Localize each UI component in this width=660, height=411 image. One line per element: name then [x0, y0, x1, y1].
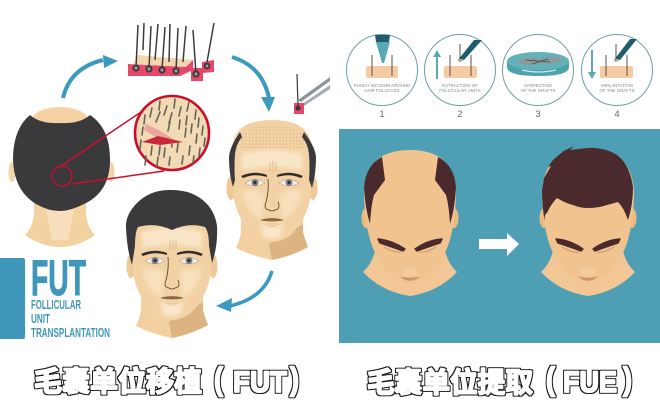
head after: restored hair — [540, 146, 636, 296]
title: FUE — [367, 361, 632, 399]
arrow: before to after — [479, 233, 519, 256]
balding head with implanted area — [226, 120, 318, 260]
hair follicle skin block with grafts — [128, 23, 214, 81]
step 3: harvesting dish — [502, 34, 574, 120]
panel: FUT follicular unit transplantation diagram — [0, 23, 330, 340]
panel: FUE before and after — [339, 129, 660, 343]
step 4: implantation: 4 — [614, 109, 620, 120]
step 1: punch incision — [346, 34, 418, 120]
arrow: step 2 to step 3 — [232, 57, 275, 112]
title: FUE: ( — [546, 361, 555, 397]
step 4: implantation: IMPLANTATION — [601, 83, 633, 88]
panel: FUE four-step strip — [346, 34, 652, 120]
FUT logo block — [0, 250, 110, 340]
title: FUT: 毛囊单位移植 — [34, 365, 202, 397]
back of head with donor area — [8, 107, 114, 247]
step 4: implantation: OF THE GRAFTS — [599, 88, 635, 93]
step 2: extraction — [424, 34, 496, 120]
tweezers holding graft — [294, 74, 330, 114]
title: FUE: FUE — [563, 366, 617, 399]
head after transplant with full hair — [126, 190, 218, 338]
step 3: harvesting dish: HARVESTING — [524, 83, 553, 88]
arrow: step 1 to step 2 — [63, 55, 118, 98]
title: FUT: ( — [214, 361, 223, 397]
step 2: extraction: 2 — [457, 109, 463, 120]
title: FUE: 毛囊单位提取 — [367, 366, 533, 398]
step 1: punch incision: HAIR FOLLICLES — [364, 88, 400, 93]
magnifier: extracted scalp strip — [58, 96, 209, 184]
step 2: extraction: FOLLICULAR UNITS — [439, 88, 481, 93]
FUT logo block: FOLLICULAR — [31, 297, 81, 312]
title: FUT: ) — [290, 361, 299, 397]
head before: receding hairline — [362, 150, 458, 296]
FUT logo block: UNIT — [31, 311, 50, 326]
FUT logo block: TRANSPLANTATION — [31, 325, 110, 340]
title: FUT: FUT — [233, 366, 287, 399]
step 1: punch incision: PUNCH INCISION AROUND — [354, 83, 410, 88]
step 4: implantation — [582, 34, 652, 120]
step 3: harvesting dish: OF THE GRAFTS — [520, 88, 556, 93]
title: FUT — [34, 361, 299, 399]
step 1: punch incision: 1 — [379, 109, 385, 120]
FUT logo block: FUT — [31, 250, 86, 306]
title: FUE: ) — [623, 361, 632, 397]
step 2: extraction: EXTRACTION OF — [442, 83, 478, 88]
step 3: harvesting dish: 3 — [535, 109, 541, 120]
arrow: step 3 to step 4 — [216, 271, 272, 312]
